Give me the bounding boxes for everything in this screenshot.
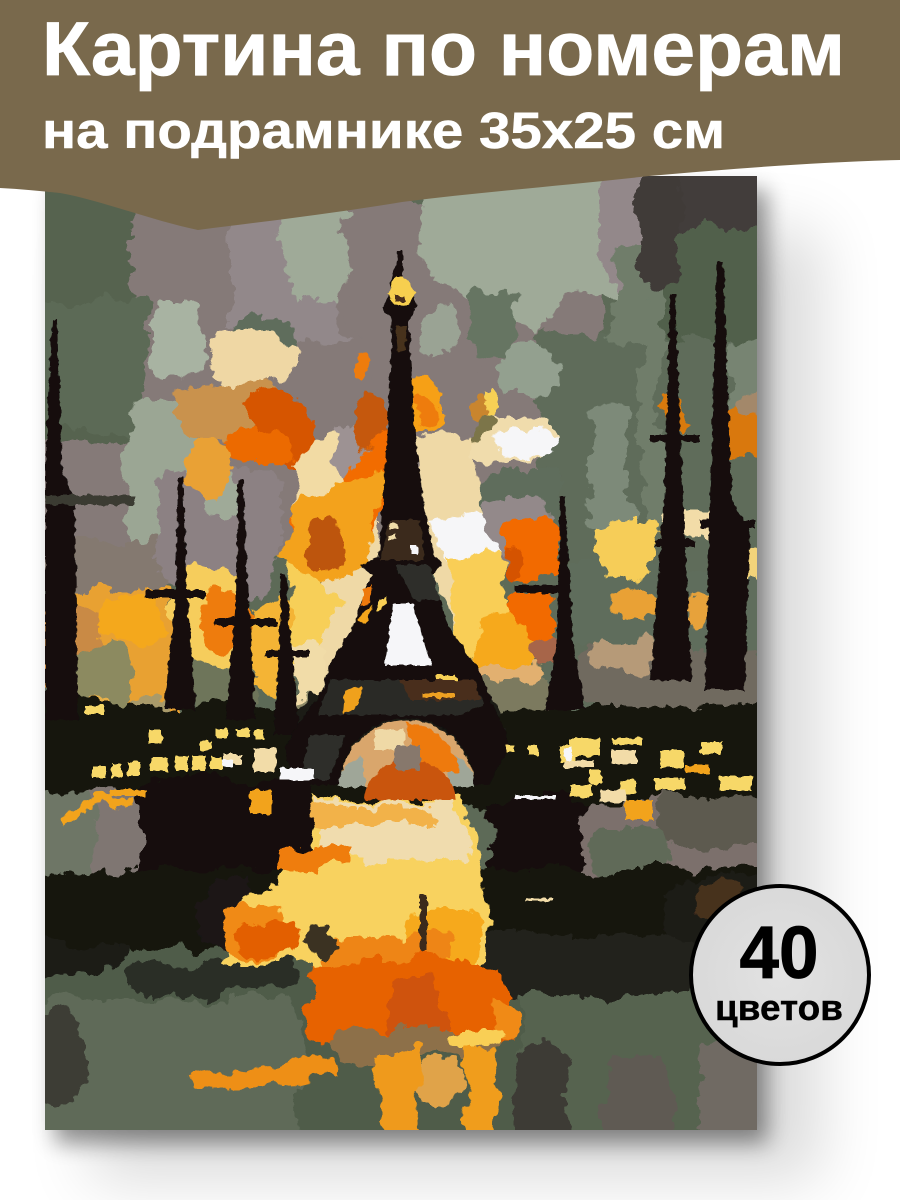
distant silhouettes bbox=[45, 262, 755, 735]
subtitle: на подрамнике 35х25 см bbox=[42, 102, 725, 159]
canvas shadow bbox=[55, 190, 820, 1180]
top banner bbox=[0, 0, 900, 230]
painted ground and river bank bbox=[45, 691, 757, 1130]
badge: 40 colours bbox=[691, 886, 869, 1064]
painting: Eiffel tower at dusk bbox=[45, 176, 757, 1130]
painted sky and background bbox=[45, 176, 757, 712]
badge number: 40 bbox=[740, 911, 818, 994]
badge label: цветов bbox=[715, 987, 843, 1028]
painted sunset glow bbox=[30, 335, 771, 730]
title: Картина по номерам bbox=[42, 7, 845, 92]
Eiffel tower silhouette bbox=[285, 251, 510, 785]
sun under the arch bbox=[338, 720, 474, 800]
painted reflection on the water bbox=[60, 790, 515, 1150]
embankment lights bbox=[85, 706, 752, 950]
